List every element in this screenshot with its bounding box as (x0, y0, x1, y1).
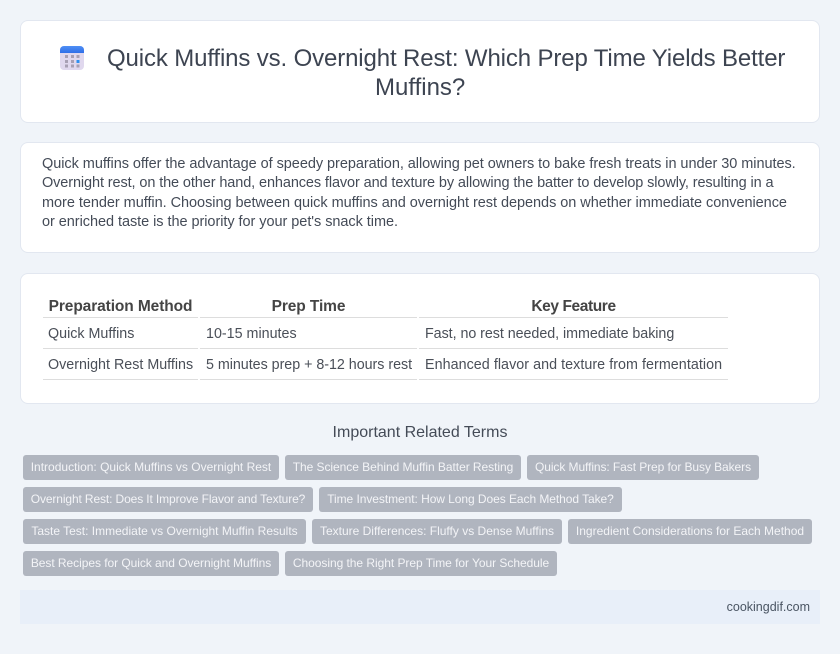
table header (43, 298, 728, 318)
related terms chips: Best Recipes for Quick and Overnight Muffins (31, 556, 271, 570)
table row: overnight rest muffins (43, 357, 728, 380)
related terms chips (23, 455, 812, 576)
related terms chips: Texture Differences: Fluffy vs Dense Muffins (320, 524, 554, 538)
panel: introduction text (20, 142, 820, 253)
panel: comparison table (20, 273, 820, 404)
related terms chips: Choosing the Right Prep Time for Your Schedule (293, 556, 549, 570)
table row: quick muffins (43, 326, 728, 349)
paragraph: or enriched taste is the priority for your pet's snack time. (42, 214, 398, 230)
title: Quick Muffins vs. Overnight Rest: Which Prep Time Yields Better (107, 45, 785, 72)
related terms chips: The Science Behind Muffin Batter Resting (293, 460, 513, 474)
table row: overnight rest muffins: 5 minutes prep + 8-12 hours rest (206, 357, 412, 373)
related terms chips: Overnight Rest: Does It Improve Flavor and Texture? (31, 492, 305, 506)
paragraph: Overnight rest, on the other hand, enhances flavor and texture by allowing the batter to develop slowly, resulting in a (42, 174, 773, 190)
paragraph: Quick muffins offer the advantage of speedy preparation, allowing pet owners to bake fresh treats in under 30 minutes. (42, 156, 796, 172)
table row: quick muffins: Quick Muffins (48, 326, 134, 342)
icon: calendar (60, 46, 84, 70)
table row: quick muffins: 10-15 minutes (206, 326, 297, 342)
table header: Preparation Method (49, 298, 192, 315)
title: Muffins? (375, 74, 465, 101)
related terms chips: Ingredient Considerations for Each Method (576, 524, 804, 538)
table header: Key Feature (531, 298, 616, 315)
table row: quick muffins: Fast, no rest needed, immediate baking (425, 326, 674, 342)
heading: related terms: Important Related Terms (333, 424, 507, 441)
related terms chips: Introduction: Quick Muffins vs Overnight Rest (31, 460, 271, 474)
related terms chips: Quick Muffins: Fast Prep for Busy Bakers (535, 460, 751, 474)
footer (20, 590, 820, 624)
related terms chips: Time Investment: How Long Does Each Method Take? (327, 492, 614, 506)
related terms chips: Taste Test: Immediate vs Overnight Muffin Results (31, 524, 298, 538)
paragraph (42, 156, 796, 230)
table header: Prep Time (272, 298, 345, 315)
table row: overnight rest muffins: Enhanced flavor and texture from fermentation (425, 357, 722, 373)
footer source text: cookingdif.com (727, 600, 810, 614)
title (107, 45, 785, 101)
table row: overnight rest muffins: Overnight Rest Muffins (48, 357, 193, 373)
paragraph: more tender muffin. Choosing between quick muffins and overnight rest depends on whether immediate convenience (42, 195, 787, 211)
panel: title card (20, 20, 820, 123)
